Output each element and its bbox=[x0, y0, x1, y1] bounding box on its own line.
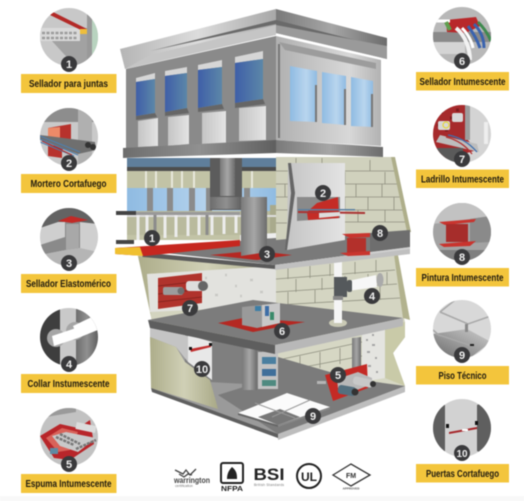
logo: FM approved: FM bbox=[346, 473, 356, 480]
intumescent brick 7 bbox=[158, 273, 208, 309]
badge 6: 6 bbox=[279, 326, 285, 338]
item 6: Sellador Intumescente: 6 bbox=[459, 56, 465, 68]
item 6: Sellador Intumescente: Sellador Intumescente bbox=[420, 77, 506, 88]
item 4: Collar Instumescente: Collar Instumescente bbox=[28, 379, 110, 390]
red intumescent foam 5 bbox=[317, 364, 376, 401]
upper storey bbox=[120, 9, 387, 158]
badge 2 bbox=[315, 185, 331, 201]
logo: warrington: warrington bbox=[173, 476, 210, 485]
column and cable tray bbox=[242, 348, 278, 390]
left windows bbox=[136, 51, 265, 120]
item 4: Collar Instumescente bbox=[21, 308, 116, 393]
logo: UL bbox=[297, 464, 321, 488]
badge 1 bbox=[144, 230, 160, 246]
badge 2: 2 bbox=[320, 188, 326, 200]
badge 4 bbox=[364, 288, 380, 304]
badge 6 bbox=[274, 323, 290, 339]
badge 9: 9 bbox=[310, 411, 316, 423]
red joint seal strip bbox=[115, 197, 292, 260]
item 8: Pintura Intumescente: Pintura Intumescente bbox=[422, 273, 504, 284]
item 5: Espuma Intumescente bbox=[21, 408, 116, 493]
logo: UL: UL bbox=[301, 470, 317, 484]
item 10: Puertas Cortafuego: 10 bbox=[456, 449, 468, 460]
logo: NFPA: NFPA bbox=[221, 486, 243, 493]
middle room walls bbox=[138, 255, 410, 350]
ground floor room bbox=[150, 322, 405, 438]
badge 1: 1 bbox=[149, 233, 155, 245]
first floor slab bbox=[138, 230, 410, 270]
floor edges bbox=[151, 388, 278, 438]
badge 10: 10 bbox=[196, 364, 208, 376]
badge 5: 5 bbox=[335, 370, 341, 382]
item 3: Sellador Elastomérico bbox=[21, 208, 116, 293]
upper left facade bbox=[126, 36, 276, 150]
logo: FM approved bbox=[333, 464, 370, 490]
item 10: Puertas Cortafuego: Puertas Cortafuego bbox=[426, 469, 499, 480]
second floor slab bbox=[148, 300, 403, 354]
item 1: Sellador para juntas: 1 bbox=[66, 59, 72, 71]
badge 7 bbox=[182, 300, 198, 316]
item 2: Mortero Cortafuego: 2 bbox=[66, 158, 72, 170]
badge 4: 4 bbox=[369, 291, 376, 303]
upper room back wall bbox=[127, 158, 277, 240]
item 7: Ladrillo Intumescente: Ladrillo Intumescente bbox=[421, 174, 504, 186]
item 8: Pintura Intumescente bbox=[416, 203, 509, 286]
item 2: Mortero Cortafuego bbox=[21, 108, 116, 193]
item 3: Sellador Elastomérico: Sellador Elastomérico bbox=[26, 279, 111, 290]
badge 3 bbox=[259, 246, 275, 262]
raised floor 9 bbox=[238, 393, 330, 427]
item 3: Sellador Elastomérico: 3 bbox=[66, 258, 72, 270]
logo: BSI: British Standards bbox=[254, 483, 284, 487]
pipe with intumescent collar 4 bbox=[333, 262, 384, 322]
building illustration bbox=[115, 9, 411, 440]
duct bbox=[210, 158, 242, 210]
railing bbox=[116, 211, 277, 244]
sealed penetration 6 bbox=[218, 303, 305, 332]
item 9: Piso Técnico: 9 bbox=[459, 350, 465, 362]
item 9: Piso Técnico: Piso Técnico bbox=[438, 371, 486, 382]
logo: NFPA bbox=[221, 463, 243, 493]
certification logos bbox=[173, 463, 370, 493]
roof bbox=[120, 9, 387, 69]
logo: FM approved: APPROVED bbox=[343, 486, 360, 490]
item 6: Sellador Intumescente bbox=[416, 7, 509, 90]
right windows bbox=[290, 66, 373, 127]
badge 7: 7 bbox=[187, 303, 193, 315]
item 2: Mortero Cortafuego: Mortero Cortafuego bbox=[30, 179, 106, 190]
item 5: Espuma Intumescente: Espuma Intumescente bbox=[26, 479, 112, 490]
item 1: Sellador para juntas: Sellador para juntas bbox=[29, 79, 108, 90]
left olive wall bbox=[150, 337, 218, 409]
logo: warrington bbox=[173, 469, 210, 488]
item 1: Sellador para juntas bbox=[21, 8, 116, 93]
item 5: Espuma Intumescente: 5 bbox=[66, 459, 72, 471]
item 7: Ladrillo Intumescente: 7 bbox=[459, 154, 465, 166]
logo: warrington: certification bbox=[175, 484, 193, 488]
logo: BSI: BSI bbox=[254, 465, 284, 484]
item 4: Collar Instumescente: 4 bbox=[66, 359, 73, 371]
badge 3: 3 bbox=[264, 249, 270, 261]
badge 5 bbox=[330, 367, 346, 383]
upper right facade bbox=[276, 36, 381, 146]
item 8: Pintura Intumescente: 8 bbox=[459, 252, 465, 264]
mortar panel 2 bbox=[285, 163, 365, 250]
door 10 bbox=[188, 335, 212, 380]
item 9: Piso Técnico bbox=[416, 300, 509, 384]
floor band bbox=[123, 140, 276, 158]
badge 9 bbox=[305, 408, 321, 424]
item 10: Puertas Cortafuego bbox=[416, 399, 509, 482]
brick wall upper bbox=[276, 157, 411, 240]
steel beam with intumescent paint 8 bbox=[340, 230, 410, 256]
item 7: Ladrillo Intumescente bbox=[416, 105, 509, 188]
badge 8 bbox=[372, 225, 388, 241]
badge 8: 8 bbox=[377, 228, 383, 240]
light panels bbox=[138, 106, 266, 147]
building number badges bbox=[144, 185, 388, 424]
badge 10 bbox=[194, 361, 210, 377]
